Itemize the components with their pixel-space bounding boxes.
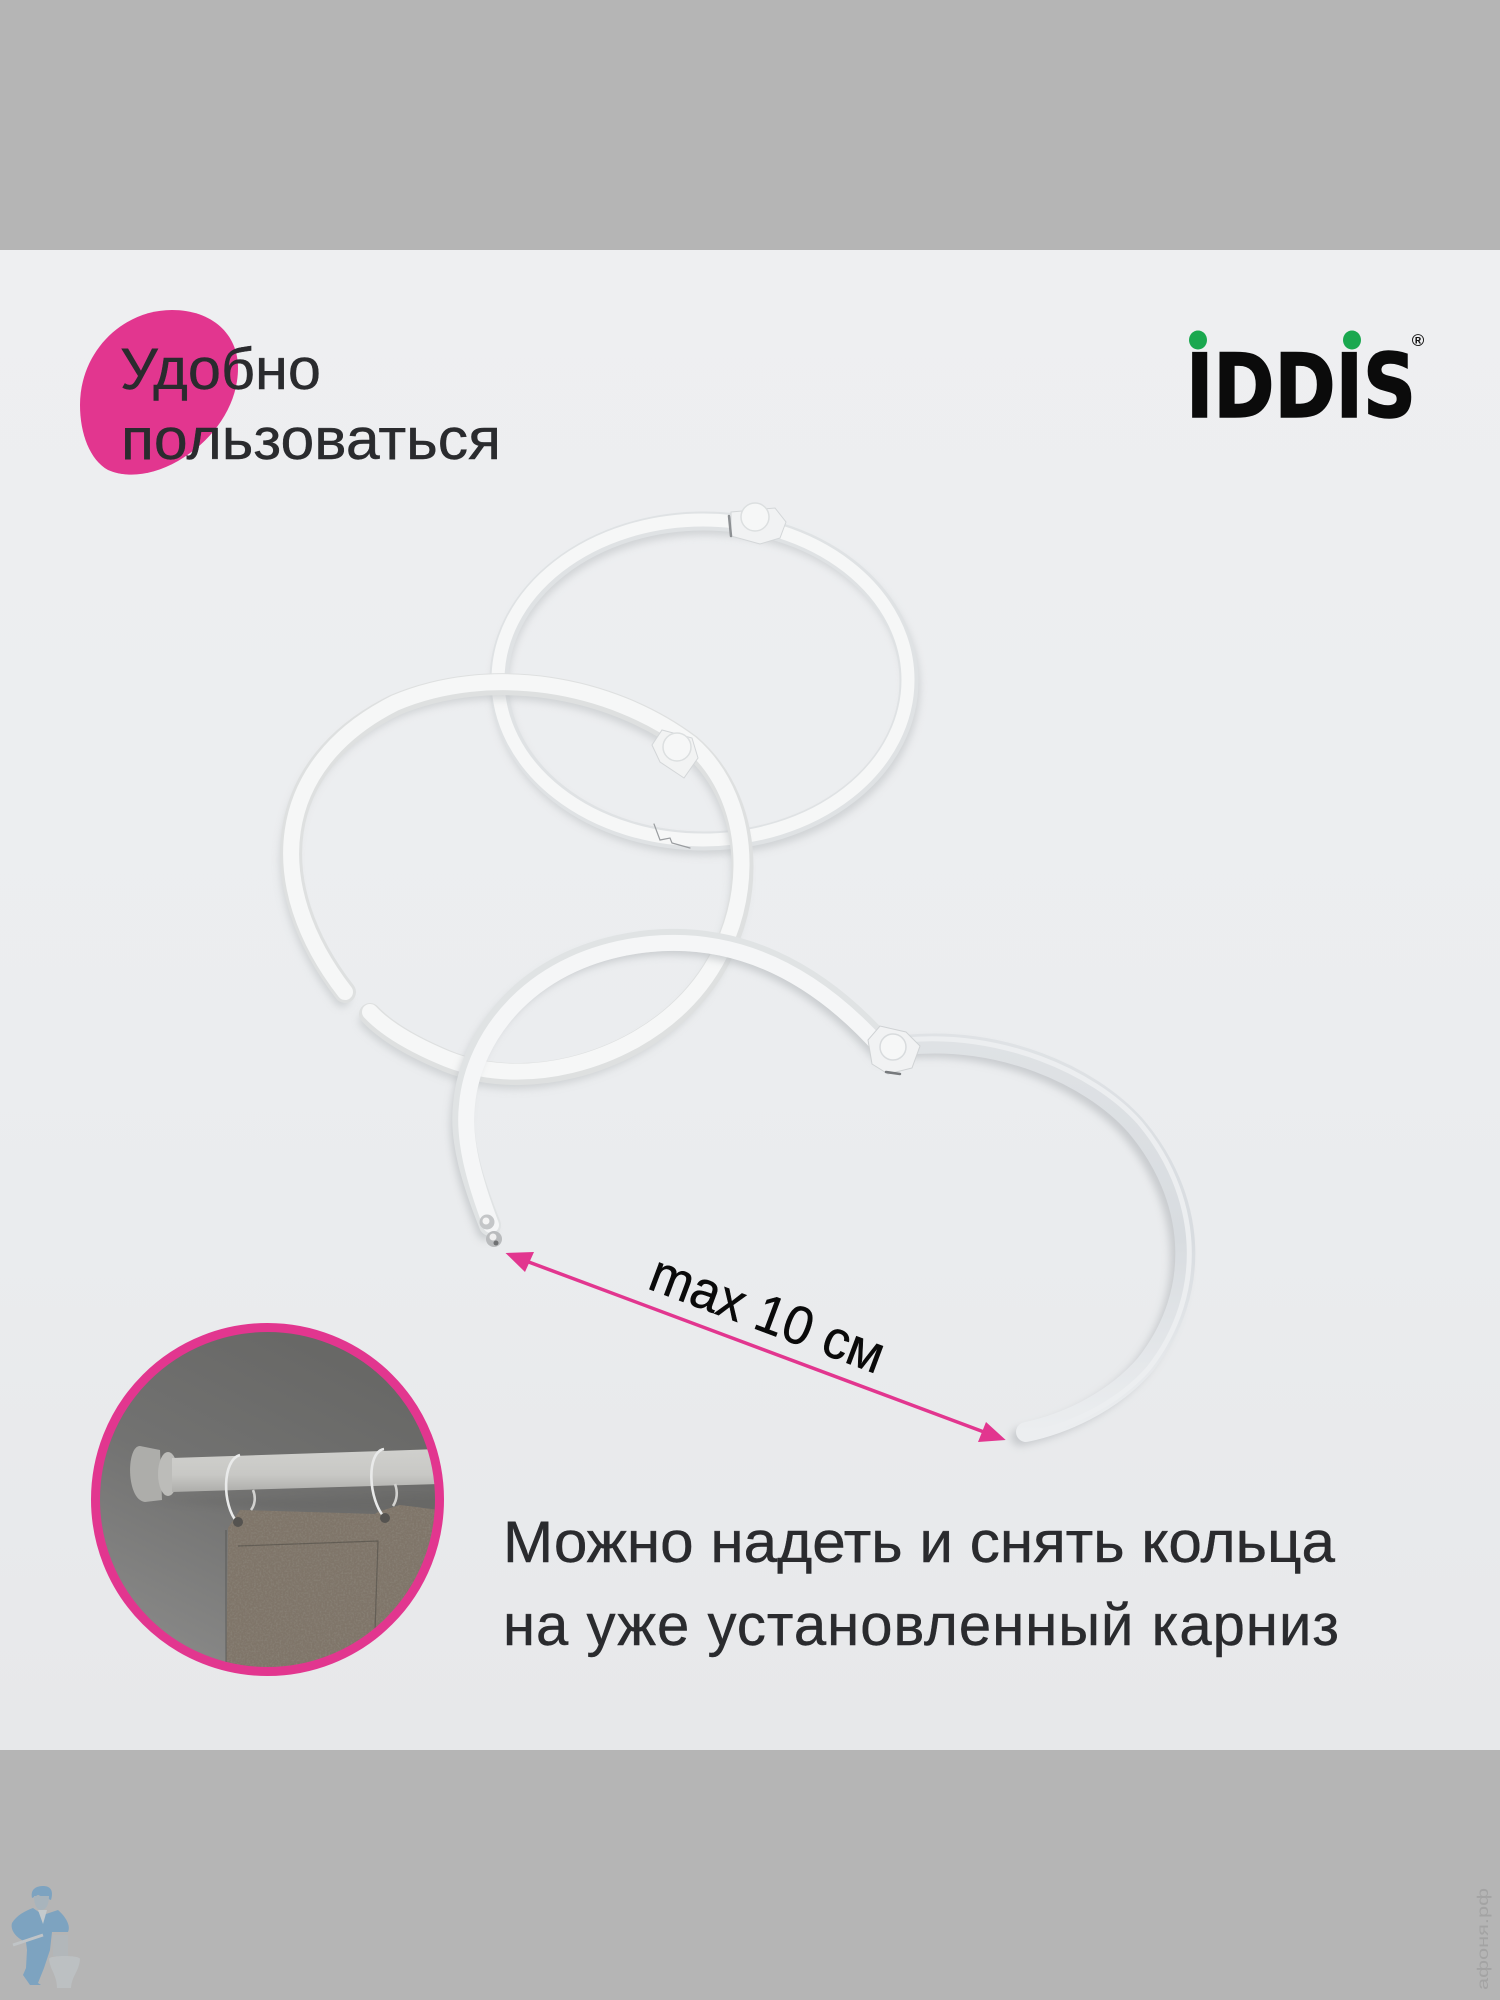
inset photo: curtain rod with rings bbox=[92, 1323, 444, 1690]
ring 1 latch detail bbox=[654, 824, 690, 848]
ring 1: top right bbox=[498, 503, 912, 847]
bottom grey band bbox=[0, 1750, 1500, 2000]
rod shadow bbox=[150, 1495, 440, 1515]
icon: plumber watermark bbox=[12, 1886, 80, 1988]
heading: Удобно bbox=[120, 337, 321, 402]
curtain bbox=[226, 1505, 434, 1667]
curtain rings bbox=[226, 1449, 397, 1522]
caption: на уже установленный карниз bbox=[503, 1593, 1339, 1658]
dimension label: max 10 см bbox=[642, 1243, 893, 1385]
wall flange bbox=[130, 1446, 162, 1502]
ring 1 clasp bbox=[729, 503, 786, 544]
logo: IDDIS: IDDIS bbox=[1186, 335, 1416, 438]
ring 3 metal tip bbox=[480, 1214, 502, 1247]
heading: пользоваться bbox=[121, 407, 501, 472]
ring 3 clasp bbox=[868, 1026, 920, 1074]
curtain fold and stitching bbox=[226, 1530, 378, 1665]
top grey band bbox=[0, 0, 1500, 250]
light product panel bbox=[0, 250, 1500, 1750]
caption: Можно надеть и снять кольца bbox=[503, 1510, 1336, 1575]
dimension arrow bbox=[506, 1252, 1006, 1442]
ring 2: middle bbox=[288, 682, 742, 1081]
pink blob behind heading bbox=[80, 310, 238, 475]
logo: IDDIS: ® bbox=[1412, 331, 1425, 350]
ring 2 clasp bbox=[652, 730, 698, 778]
rod bbox=[172, 1449, 440, 1492]
ring 3: bottom, open bbox=[459, 940, 1189, 1437]
vertical watermark: афоня.рф bbox=[1475, 1888, 1492, 1990]
